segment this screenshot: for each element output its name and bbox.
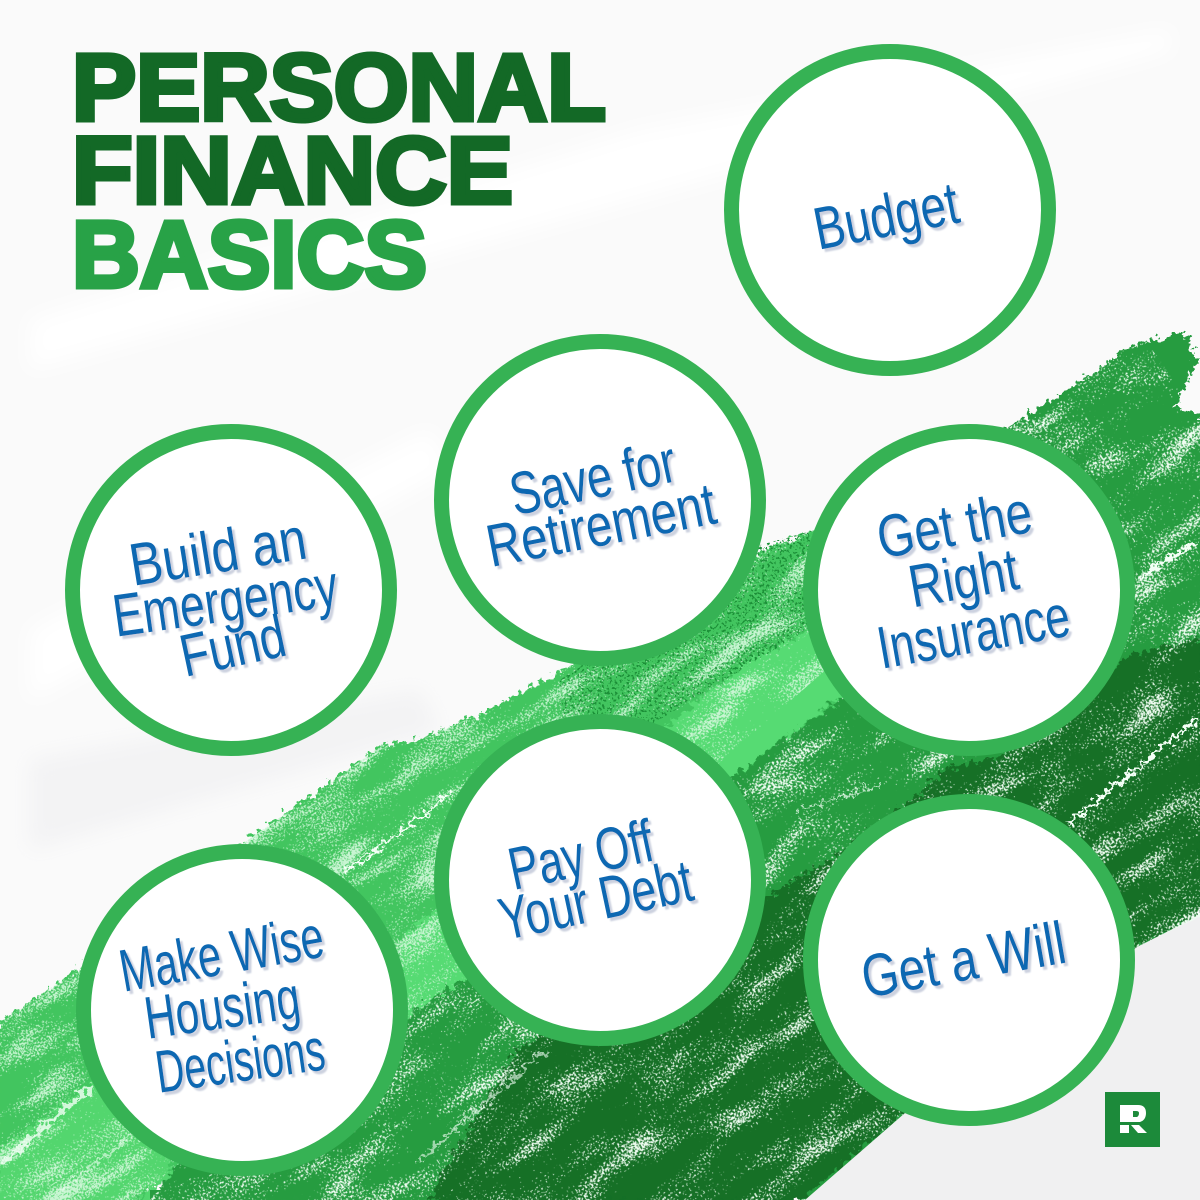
circle: Build an Emergency Fund xyxy=(72,432,390,748)
circle: Get a Will: Get a Will xyxy=(856,909,1071,1011)
circle: Save for Retirement xyxy=(442,342,758,658)
title line: FINANCE: FINANCE xyxy=(72,118,513,224)
white streaks xyxy=(6,543,1195,1195)
title xyxy=(72,35,606,308)
circle: Make Wise Housing Decisions xyxy=(84,852,400,1168)
logo xyxy=(1105,1092,1160,1147)
circle: Build an Emergency Fund: Build an xyxy=(125,505,311,599)
medium green stroke xyxy=(150,332,1200,1200)
circle: Get the Right Insurance xyxy=(810,432,1128,748)
dark speckled edge on light stroke xyxy=(560,530,815,780)
circle: Save for Retirement: Save for xyxy=(504,428,682,528)
circle: Build an Emergency Fund: Emergency xyxy=(109,552,342,650)
speckle texture: dark strokes xyxy=(150,332,1200,1200)
circle: Get the Right Insurance: Right xyxy=(903,535,1024,620)
circle: Get the Right Insurance: Insurance xyxy=(872,582,1075,682)
corner xyxy=(805,915,1200,1200)
dark green stroke xyxy=(430,638,1200,1200)
circle: Budget xyxy=(732,52,1048,368)
circle: Make Wise Housing Decisions: Make Wise xyxy=(114,903,329,1005)
circle: Make Wise Housing Decisions: Housing xyxy=(140,964,304,1052)
circle: Pay Off Your Debt: Pay Off xyxy=(502,807,659,903)
circle: Pay Off Your Debt: Your Debt xyxy=(493,847,699,953)
circle: Save for Retirement: Retirement xyxy=(481,470,722,580)
circle: Get a Will xyxy=(810,802,1128,1118)
title line: BASICS: BASICS xyxy=(72,202,427,308)
circle: Build an Emergency Fund: Fund xyxy=(174,602,292,690)
speckle texture: light stroke xyxy=(0,525,860,1200)
circle: Pay Off Your Debt xyxy=(442,722,758,1038)
circle: Get the Right Insurance: Get the xyxy=(872,478,1037,571)
brush strokes xyxy=(0,332,1200,1200)
light green stroke xyxy=(0,525,860,1200)
circle: Make Wise Housing Decisions: Decisions xyxy=(151,1016,329,1106)
title line: PERSONAL: PERSONAL xyxy=(72,35,606,141)
circle: Budget: Budget xyxy=(808,169,964,263)
